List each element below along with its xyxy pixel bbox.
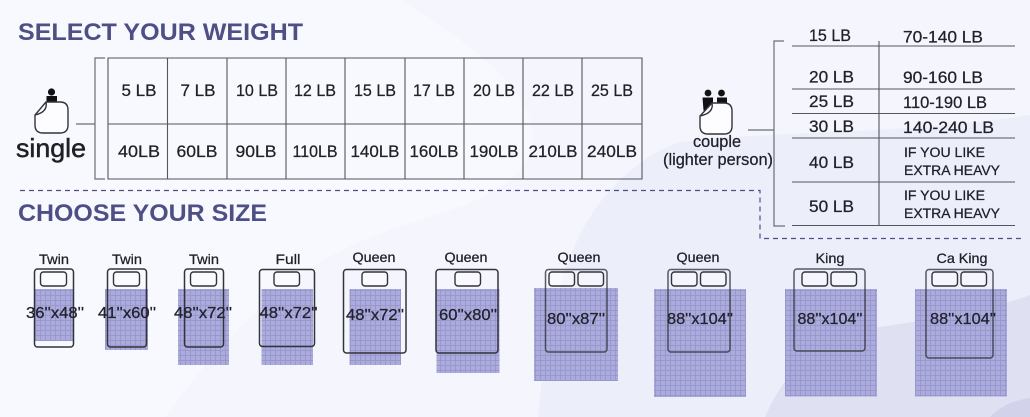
size: queen 80x87: 80''x87'' [547,311,605,328]
column: body weights: 90-160 LB [903,69,983,87]
column: body weights: 110-190 LB [903,94,987,112]
row: body weights: 160LB [410,142,458,161]
row: blanket weights [122,81,633,100]
column: body weights: IF YOU LIKE [904,145,985,160]
column: blanket weights: 30 LB [809,118,854,136]
row: body weights [118,142,637,161]
row: body weights: 60LB [176,142,218,161]
size: full 48x72: 48''x72'' [260,305,318,322]
size: queen 88x104: 88''x104'' [667,311,733,328]
column: blanket weights: 15 LB [809,27,851,45]
size: twin 41x60: Twin [112,251,142,267]
size: full 48x72 [260,251,318,365]
size: queen 48x72: 48''x72'' [346,307,404,324]
label: couple: (lighter person) [663,150,773,169]
row: blanket weights: 22 LB [532,81,574,100]
row: blanket weights: 5 LB [122,81,156,100]
row: blanket weights: 25 LB [591,81,633,100]
size: twin 36x48: Twin [39,251,69,267]
column: blanket weights: 20 LB [809,68,854,86]
size: full 48x72: Full [276,251,300,267]
row: blanket weights: 17 LB [413,81,455,100]
row: body weights: 210LB [528,142,578,161]
label: couple: couple [693,133,741,151]
size: twin 41x60 [98,251,156,350]
size: twin 48x72 [174,251,232,365]
row: blanket weights: 15 LB [354,81,396,100]
row: body weights: 140LB [350,142,400,161]
size: king 88x104 [785,250,877,396]
column: body weights: 70-140 LB [903,28,983,46]
column: body weights: 140-240 LB [903,119,994,137]
column: blanket weights: 50 LB [809,198,854,216]
heading: choose your size: CHOOSE YOUR SIZE [18,200,267,227]
label: couple [663,133,773,169]
connector and bracket: couple [748,41,785,226]
row: blanket weights: 7 LB [180,81,216,100]
size: ca king 88x104 [915,250,1007,396]
column: blanket weights: 25 LB [809,93,854,111]
row: blanket weights: 10 LB [236,81,278,100]
size: queen 80x87 [534,249,618,381]
size: queen 60x80: Queen [444,249,488,265]
column: blanket weights: 40 LB [809,154,854,172]
row: blanket weights: 12 LB [294,81,336,100]
size: queen 48x72 [344,249,406,365]
row: body weights: 90LB [236,142,276,161]
icon: couple with blanket [700,90,732,134]
size: queen 80x87: Queen [558,249,600,265]
icon: single person with blanket [35,88,68,133]
size: queen 60x80 [436,249,500,373]
heading: select your weight: SELECT YOUR WEIGHT [18,19,303,46]
column: blanket weights [809,27,854,216]
row: body weights: 190LB [470,142,518,161]
table: couple weights [792,27,1015,226]
row: body weights: 110LB [292,142,338,161]
size: queen 88x104 [654,249,746,397]
column: body weights [903,28,1000,221]
column: body weights: IF YOU LIKE [904,188,985,203]
column: body weights: EXTRA HEAVY [904,163,1000,178]
row: body weights: 40LB [118,142,160,161]
row: blanket weights: 20 LB [473,81,515,100]
size: queen 48x72: Queen [352,249,396,265]
size: ca king 88x104: 88''x104'' [930,311,996,328]
size: king 88x104: 88''x104'' [798,311,862,328]
size: king 88x104: King [816,250,844,266]
size: twin 48x72: Twin [189,251,219,267]
row: body weights: 240LB [587,142,637,161]
size: twin 41x60: 41''x60'' [98,305,156,322]
label: single: single [16,133,86,163]
column: body weights: EXTRA HEAVY [904,206,1000,221]
table: single weights [108,58,642,179]
size: queen 88x104: Queen [676,249,720,265]
size: ca king 88x104: Ca King [936,250,988,266]
connector and bracket: single [76,58,105,179]
size: queen 60x80: 60''x80'' [439,307,497,324]
size: twin 36x48: 36''x48'' [26,305,84,322]
size: twin 36x48 [26,251,84,347]
size: twin 48x72: 48''x72'' [174,305,232,322]
